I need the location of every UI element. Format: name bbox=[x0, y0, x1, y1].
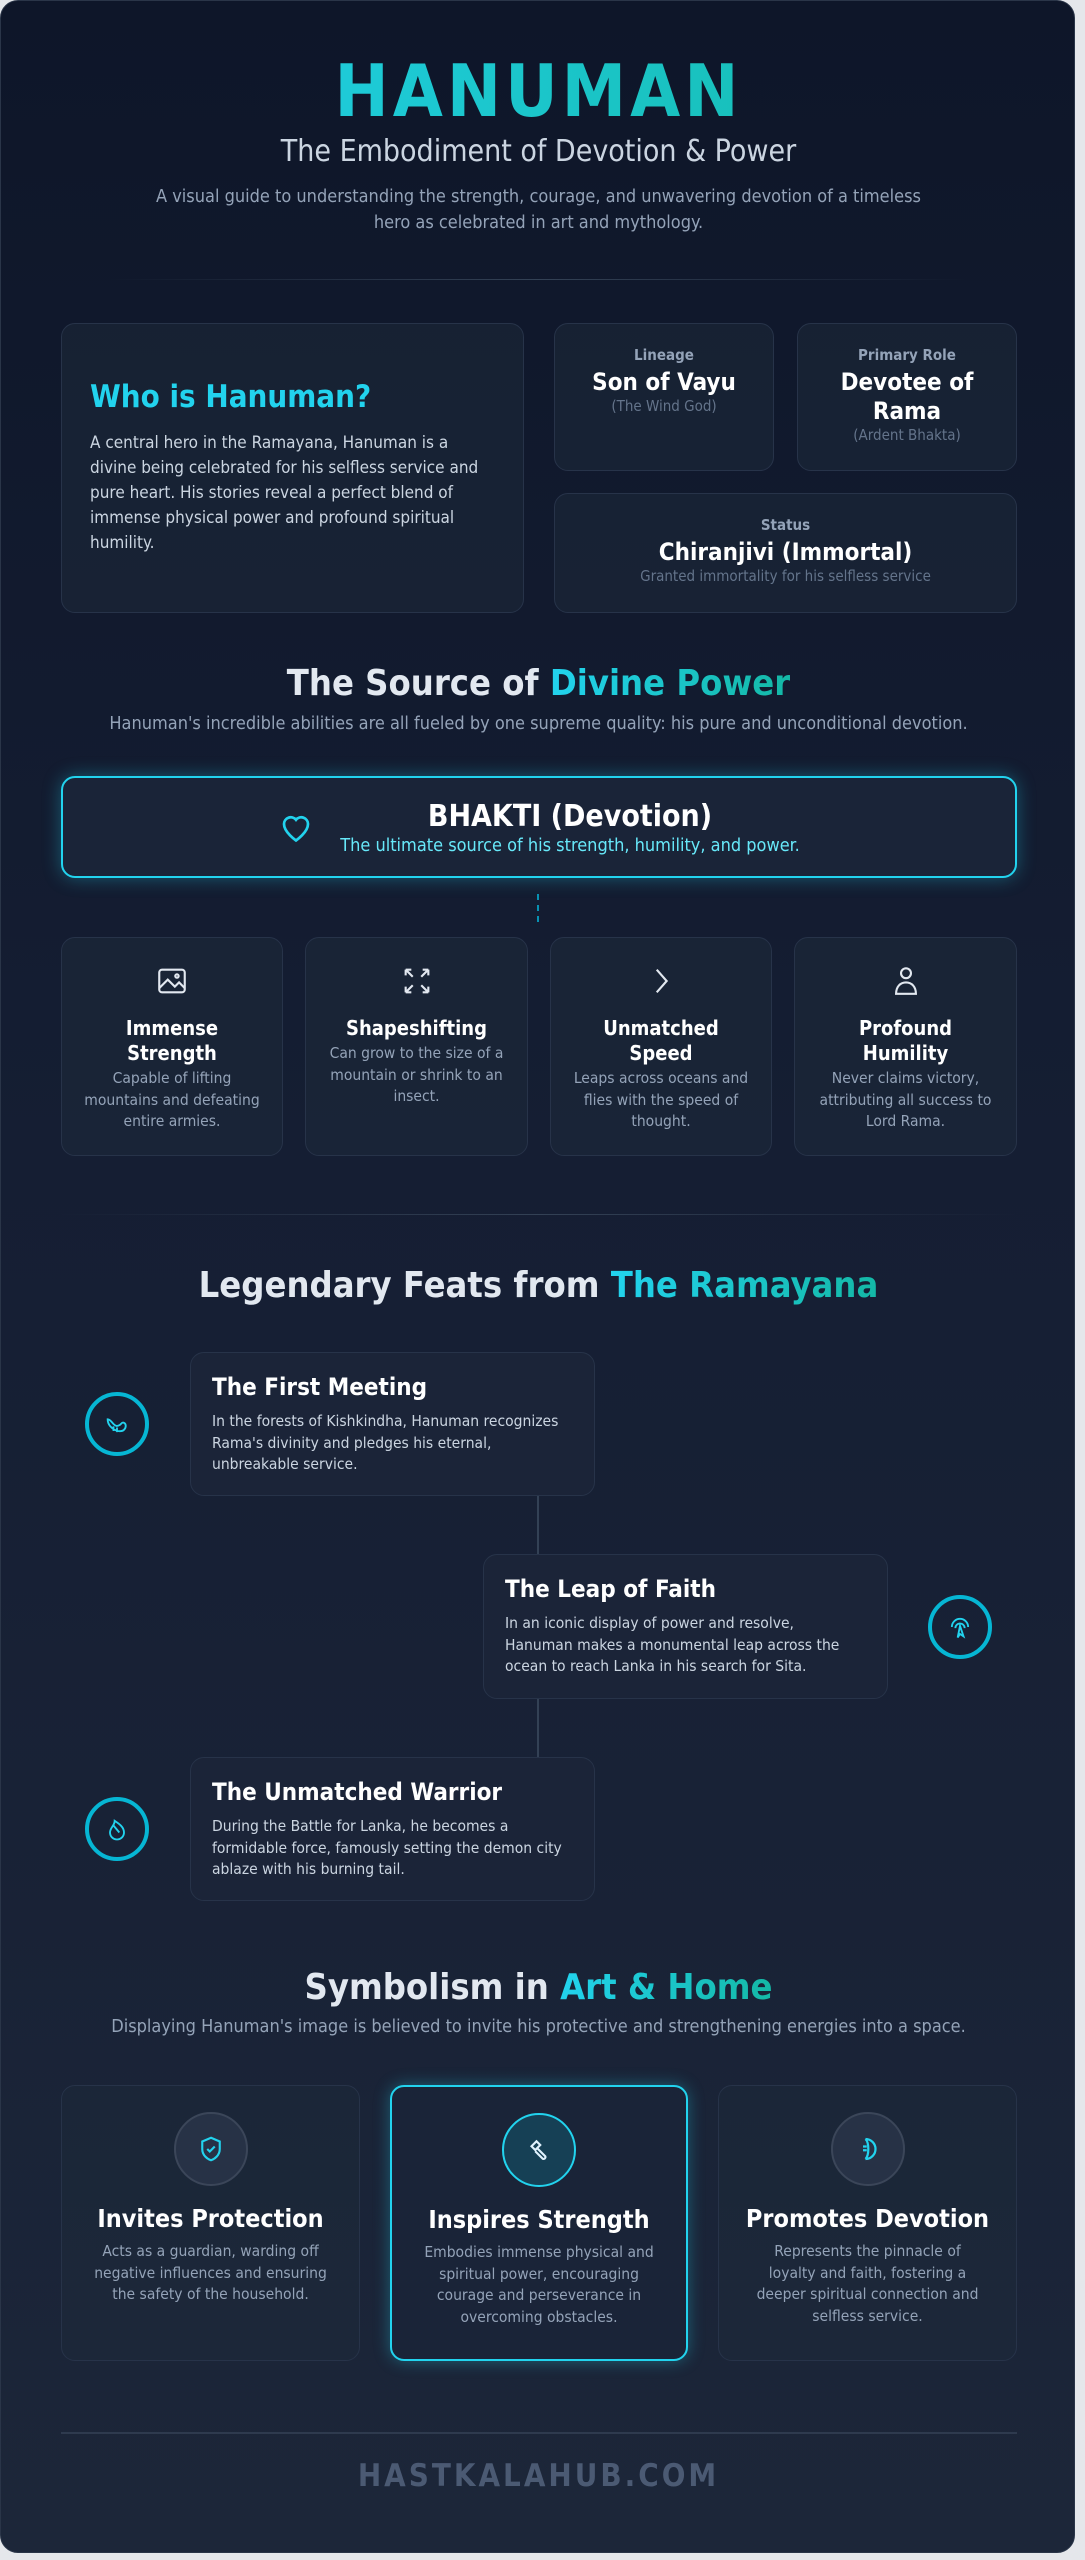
card: profound humility: Humility bbox=[863, 1041, 948, 1065]
card: promotes devotion: Promotes Devotion bbox=[746, 2204, 989, 2233]
stat: primary role bbox=[797, 323, 1017, 471]
card: invites protection bbox=[61, 2085, 360, 2361]
timeline item: unmatched warrior: During the Battle for Lanka, he becomes a formidable force, famously setting the demon city ablaze with his burning tail. bbox=[212, 1817, 562, 1878]
timeline item: first meeting: In the forests of Kishkindha, Hanuman recognizes Rama's divinity and pledges his eternal, unbreakable service. bbox=[212, 1412, 558, 1473]
timeline item: leap of faith: In an iconic display of power and resolve, Hanuman makes a monumental leap across the ocean to reach Lanka in his search for Sita. bbox=[505, 1614, 839, 1675]
stat: lineage bbox=[554, 323, 774, 471]
card: shapeshifting: Can grow to the size of a mountain or shrink to an insect. bbox=[330, 1044, 503, 1105]
timeline item: unmatched warrior: The Unmatched Warrior bbox=[212, 1778, 502, 1806]
timeline item: unmatched warrior bbox=[190, 1757, 595, 1901]
subtitle: The Embodiment of Devotion & Power bbox=[281, 134, 796, 169]
icon: heart bbox=[282, 816, 310, 842]
card: inspires strength bbox=[390, 2085, 688, 2361]
stat: lineage: Son of Vayu bbox=[592, 368, 736, 396]
stat: lineage: (The Wind God) bbox=[611, 397, 717, 415]
icon: leap bbox=[928, 1595, 992, 1659]
title: HANUMAN bbox=[335, 49, 742, 133]
stat: lineage: Lineage bbox=[634, 346, 694, 364]
card: inspires strength: Embodies immense physical and spiritual power, encouraging courage and perseverance in overcoming obstacles. bbox=[424, 2243, 654, 2326]
card: profound humility bbox=[794, 937, 1017, 1156]
stat: status: Granted immortality for his selfless service bbox=[640, 567, 931, 585]
card: immense strength: Strength bbox=[127, 1041, 217, 1065]
panel: who is hanuman: Who is Hanuman? bbox=[90, 379, 371, 415]
icon: first meeting bbox=[85, 1392, 149, 1456]
heading: legendary feats: Legendary Feats from The Ramayana bbox=[199, 1265, 878, 1306]
panel: who is hanuman: A central hero in the Ramayana, Hanuman is a divine being celebrated for his selfless service and pure heart. His stories reveal a perfect blend of immense physical power and profound spiritual humility. bbox=[90, 433, 478, 553]
intro text: A visual guide to understanding the strength, courage, and unwavering devotion of a timeless hero as celebrated in art and mythology. bbox=[156, 186, 921, 233]
card: invites protection: Invites Protection bbox=[97, 2204, 324, 2233]
stat: primary role: Primary Role bbox=[858, 346, 956, 364]
card: shapeshifting: Shapeshifting bbox=[346, 1016, 487, 1040]
card: profound humility: Never claims victory, attributing all success to Lord Rama. bbox=[820, 1069, 991, 1130]
panel: bhakti: The ultimate source of his strength, humility, and power. bbox=[340, 834, 800, 856]
card: unmatched speed: Leaps across oceans and flies with the speed of thought. bbox=[574, 1069, 748, 1130]
heading: source of divine power: The Source of Divine Power bbox=[287, 663, 790, 704]
subheading: Hanuman's incredible abilities are all fueled by one supreme quality: his pure and unconditional devotion. bbox=[109, 713, 968, 734]
heading: symbolism: Symbolism in Art & Home bbox=[305, 1967, 772, 2008]
card: unmatched speed bbox=[550, 937, 772, 1156]
card: shapeshifting bbox=[305, 937, 528, 1156]
stat: primary role: Rama bbox=[873, 397, 941, 425]
timeline item: leap of faith: The Leap of Faith bbox=[505, 1575, 716, 1603]
stat: status: Status bbox=[761, 516, 810, 534]
card: invites protection: Acts as a guardian, warding off negative influences and ensuring the safety of the household. bbox=[94, 2242, 327, 2303]
card: promotes devotion: Represents the pinnacle of loyalty and faith, fostering a deeper spiritual connection and selfless service. bbox=[757, 2242, 978, 2324]
title bbox=[1, 51, 1076, 131]
timeline line bbox=[537, 1352, 539, 1901]
timeline item: first meeting: The First Meeting bbox=[212, 1373, 427, 1401]
panel: bhakti bbox=[61, 776, 1017, 878]
card: unmatched speed: Unmatched bbox=[603, 1016, 719, 1040]
card: inspires strength: Inspires Strength bbox=[428, 2205, 650, 2234]
stat: status: Chiranjivi (Immortal) bbox=[659, 538, 912, 566]
stat: primary role: Devotee of bbox=[841, 368, 973, 396]
icon: warrior flame bbox=[85, 1797, 149, 1861]
stat: status bbox=[554, 493, 1017, 613]
panel: who is hanuman bbox=[61, 323, 524, 613]
subheading: Displaying Hanuman's image is believed to invite his protective and strengthening energies into a space. bbox=[111, 2016, 966, 2037]
card: immense strength bbox=[61, 937, 283, 1156]
timeline item: first meeting bbox=[190, 1352, 595, 1496]
timeline item: leap of faith bbox=[483, 1554, 888, 1699]
card: promotes devotion bbox=[718, 2085, 1017, 2361]
card: profound humility: Profound bbox=[859, 1016, 952, 1040]
card: immense strength: Capable of lifting mountains and defeating entire armies. bbox=[84, 1069, 260, 1130]
panel: bhakti: BHAKTI (Devotion) bbox=[428, 798, 712, 834]
card: immense strength: Immense bbox=[126, 1016, 218, 1040]
stat: primary role: (Ardent Bhakta) bbox=[853, 426, 961, 444]
card: unmatched speed: Speed bbox=[629, 1041, 693, 1065]
footer brand: HASTKALAHUB.COM bbox=[358, 2458, 719, 2494]
